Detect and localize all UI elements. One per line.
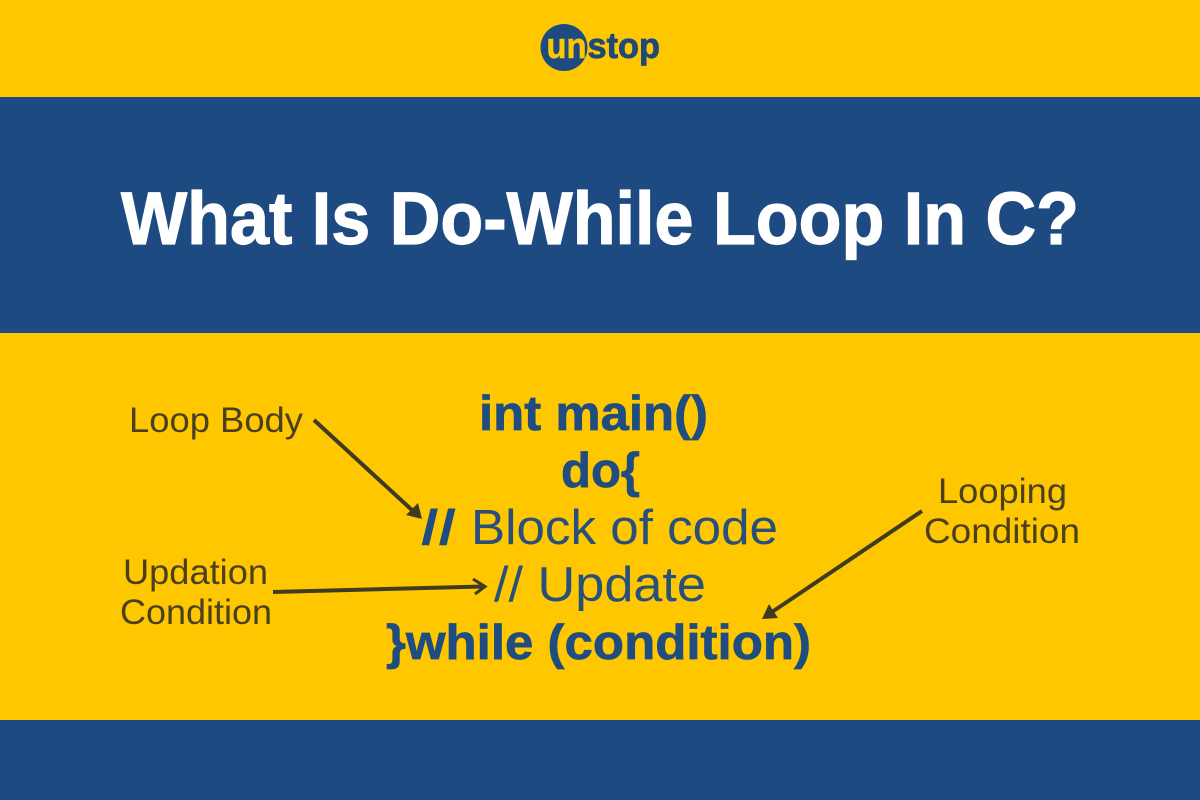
- label: Updation Condition: Condition: [120, 593, 272, 632]
- arrow: Updation Condition to update: [273, 579, 485, 594]
- footer band: [0, 720, 1200, 800]
- label: Loop Body: Loop Body: [129, 401, 304, 440]
- code block: do-while syntax: int main(): [479, 387, 708, 441]
- code block: do-while syntax: do{: [561, 444, 640, 498]
- logo: unstop: un: [546, 25, 586, 66]
- label: Looping Condition: Condition: [924, 512, 1080, 551]
- arrow: Loop Body to block of code: [314, 420, 422, 519]
- code block: do-while syntax: // Update: [494, 558, 706, 612]
- label: Updation Condition: [120, 553, 272, 632]
- title: What Is Do-While Loop In C?: [121, 177, 1079, 260]
- title banner: [0, 97, 1200, 333]
- label: Looping Condition: Looping: [938, 472, 1067, 511]
- code block: do-while syntax: Block of code: [471, 501, 778, 555]
- arrow: Looping Condition to while condition: [762, 511, 922, 619]
- label: Looping Condition: [924, 472, 1080, 551]
- code block: do-while syntax: }while (condition): [386, 616, 811, 670]
- logo: unstop: [540, 24, 660, 71]
- code block: do-while syntax: [386, 387, 811, 670]
- label: Updation Condition: Updation: [123, 553, 268, 592]
- code block: do-while syntax: //: [421, 501, 456, 555]
- logo: unstop: stop: [588, 25, 660, 66]
